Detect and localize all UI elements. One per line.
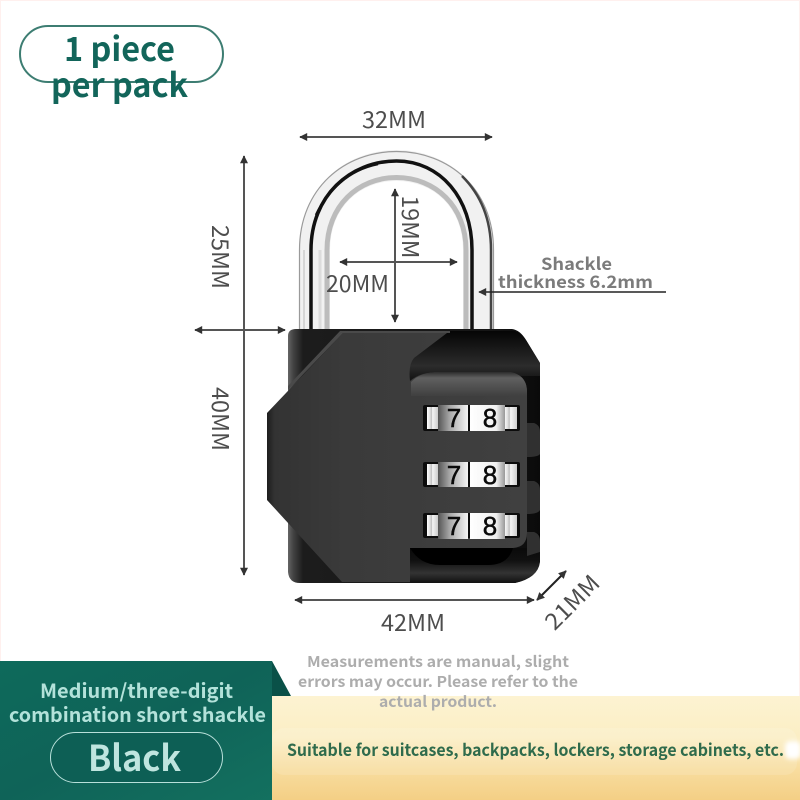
fold triangle — [272, 661, 291, 696]
dimension labels: 40MM — [205, 387, 239, 451]
lower right recess — [410, 533, 540, 583]
front plate — [267, 333, 527, 582]
usage text: Suitable for suitcases, backpacks, lockers, storage cabinets, etc. — [287, 737, 784, 761]
quantity badge: per pack — [51, 59, 188, 107]
dial window bottom: 8 — [483, 511, 497, 541]
shackle — [300, 152, 494, 332]
green footer panel — [0, 661, 291, 800]
plate top edge — [288, 331, 450, 390]
measurement disclaimer: Measurements are manual, slight — [307, 651, 570, 672]
dimension labels — [205, 101, 606, 638]
dimension labels: 20MM — [326, 265, 389, 299]
green footer panel: combination short shackle — [9, 699, 266, 728]
colour pill — [50, 730, 222, 782]
quantity badge: 1 piece — [64, 23, 175, 71]
shackle thickness label — [498, 250, 653, 293]
shackle thickness label: Shackle — [541, 250, 612, 275]
green footer panel: Medium/three-digit — [40, 675, 233, 704]
dial window middle — [423, 460, 520, 490]
dial window middle: 8 — [483, 460, 497, 490]
dial window middle: 7 — [447, 460, 461, 490]
dial window bottom — [423, 511, 520, 541]
measurement disclaimer — [298, 651, 578, 712]
raised face highlight — [411, 372, 527, 396]
dial window top: 8 — [483, 403, 497, 433]
recess shadow — [410, 548, 513, 565]
lock body — [288, 329, 540, 583]
dimension labels: 21MM — [536, 566, 606, 636]
dimension labels: 42MM — [381, 604, 445, 638]
side wheel bumps — [527, 423, 540, 556]
padlock product image — [267, 152, 540, 583]
dial window bottom: 7 — [447, 511, 461, 541]
dial window top: 7 — [447, 403, 461, 433]
dimension labels: 19MM — [395, 196, 429, 258]
shackle thickness label: thickness 6.2mm — [498, 268, 653, 293]
dimension labels: 25MM — [205, 225, 239, 289]
colour pill: Black — [88, 730, 181, 782]
dimension labels: 32MM — [362, 101, 426, 135]
measurement disclaimer: errors may occur. Please refer to the — [298, 671, 578, 692]
dial window top — [423, 403, 520, 433]
gold footer band — [272, 696, 800, 800]
top right shoulder — [408, 331, 540, 381]
quantity badge — [20, 23, 223, 107]
measurement disclaimer: actual product. — [379, 691, 497, 712]
dimension arrows — [195, 137, 666, 600]
